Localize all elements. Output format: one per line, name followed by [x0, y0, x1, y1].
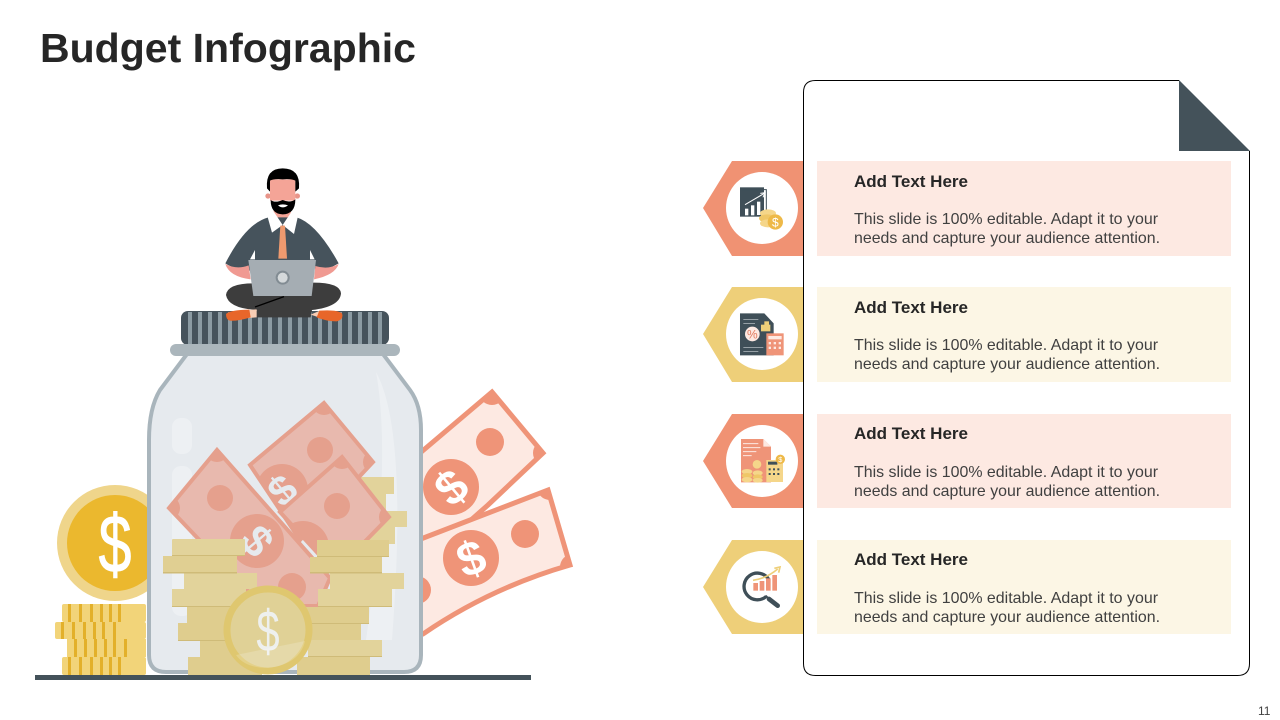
banknote front right: $	[450, 530, 493, 589]
jar contents: coins right back	[312, 477, 407, 544]
icon: report with coins and calculator	[741, 439, 785, 483]
jar lid	[170, 311, 400, 356]
icon: percent document with calculator: %	[747, 327, 758, 341]
body 2	[854, 337, 1160, 373]
page number: 11	[1258, 704, 1271, 718]
icon 2 circle	[726, 298, 798, 370]
illustration: man on money jar	[35, 168, 586, 680]
icon 3 circle	[726, 425, 798, 497]
body 3: needs and capture your audience attention.	[854, 483, 1160, 500]
tab 3	[703, 414, 803, 508]
item 1	[703, 161, 1231, 256]
card 4	[817, 540, 1231, 634]
body 1	[854, 211, 1160, 247]
body 1: This slide is 100% editable. Adapt it to your	[854, 211, 1159, 228]
heading 2: Add Text Here	[854, 298, 968, 317]
banknote front right	[423, 486, 574, 636]
title: Budget Infographic	[40, 25, 416, 71]
ground line	[35, 675, 531, 680]
body 4	[854, 590, 1160, 626]
tab 2	[703, 287, 803, 382]
coin inside jar	[227, 589, 309, 671]
large gold coin: $	[99, 499, 131, 590]
icon: chart with coins: $	[772, 215, 779, 229]
jar contents: banknotes	[166, 400, 392, 607]
item 4	[703, 540, 1231, 634]
item 3	[703, 414, 1231, 508]
banknote back right	[423, 388, 546, 536]
heading 1: Add Text Here	[854, 172, 968, 191]
jar contents: coin stacks	[163, 539, 404, 675]
icon: magnifier with growth chart	[744, 567, 780, 606]
body 4: This slide is 100% editable. Adapt it to your	[854, 590, 1159, 607]
icon 4 circle	[726, 551, 798, 623]
banknote back right: $	[425, 459, 479, 517]
body 4: needs and capture your audience attention.	[854, 609, 1160, 626]
tab 1	[703, 161, 803, 256]
card 2	[817, 287, 1231, 382]
icon: percent document with calculator	[740, 313, 784, 355]
card 3	[817, 414, 1231, 508]
icon 1 circle	[726, 172, 798, 244]
body 2: needs and capture your audience attention.	[854, 356, 1160, 373]
folded corner	[1179, 80, 1250, 151]
body 1: needs and capture your audience attention.	[854, 230, 1160, 247]
jar highlight long	[172, 372, 397, 640]
large gold coin	[57, 485, 173, 601]
item 2	[703, 287, 1231, 382]
icon: chart with coins	[740, 187, 783, 230]
body 3	[854, 464, 1160, 500]
icon: report with coins and calculator: $	[778, 455, 782, 464]
jar contents: banknotes: $	[258, 465, 306, 516]
coin inside jar: $	[256, 598, 280, 664]
card 1	[817, 161, 1231, 256]
seated man with laptop	[225, 168, 342, 321]
body 2: This slide is 100% editable. Adapt it to your	[854, 337, 1159, 354]
jar contents: banknotes: $	[230, 516, 283, 566]
coin stack left	[55, 604, 146, 675]
document panel outline	[804, 80, 1250, 676]
tab 4	[703, 540, 803, 634]
heading 4: Add Text Here	[854, 550, 968, 569]
body 3: This slide is 100% editable. Adapt it to your	[854, 464, 1159, 481]
heading 3: Add Text Here	[854, 424, 968, 443]
glass jar	[149, 354, 421, 672]
